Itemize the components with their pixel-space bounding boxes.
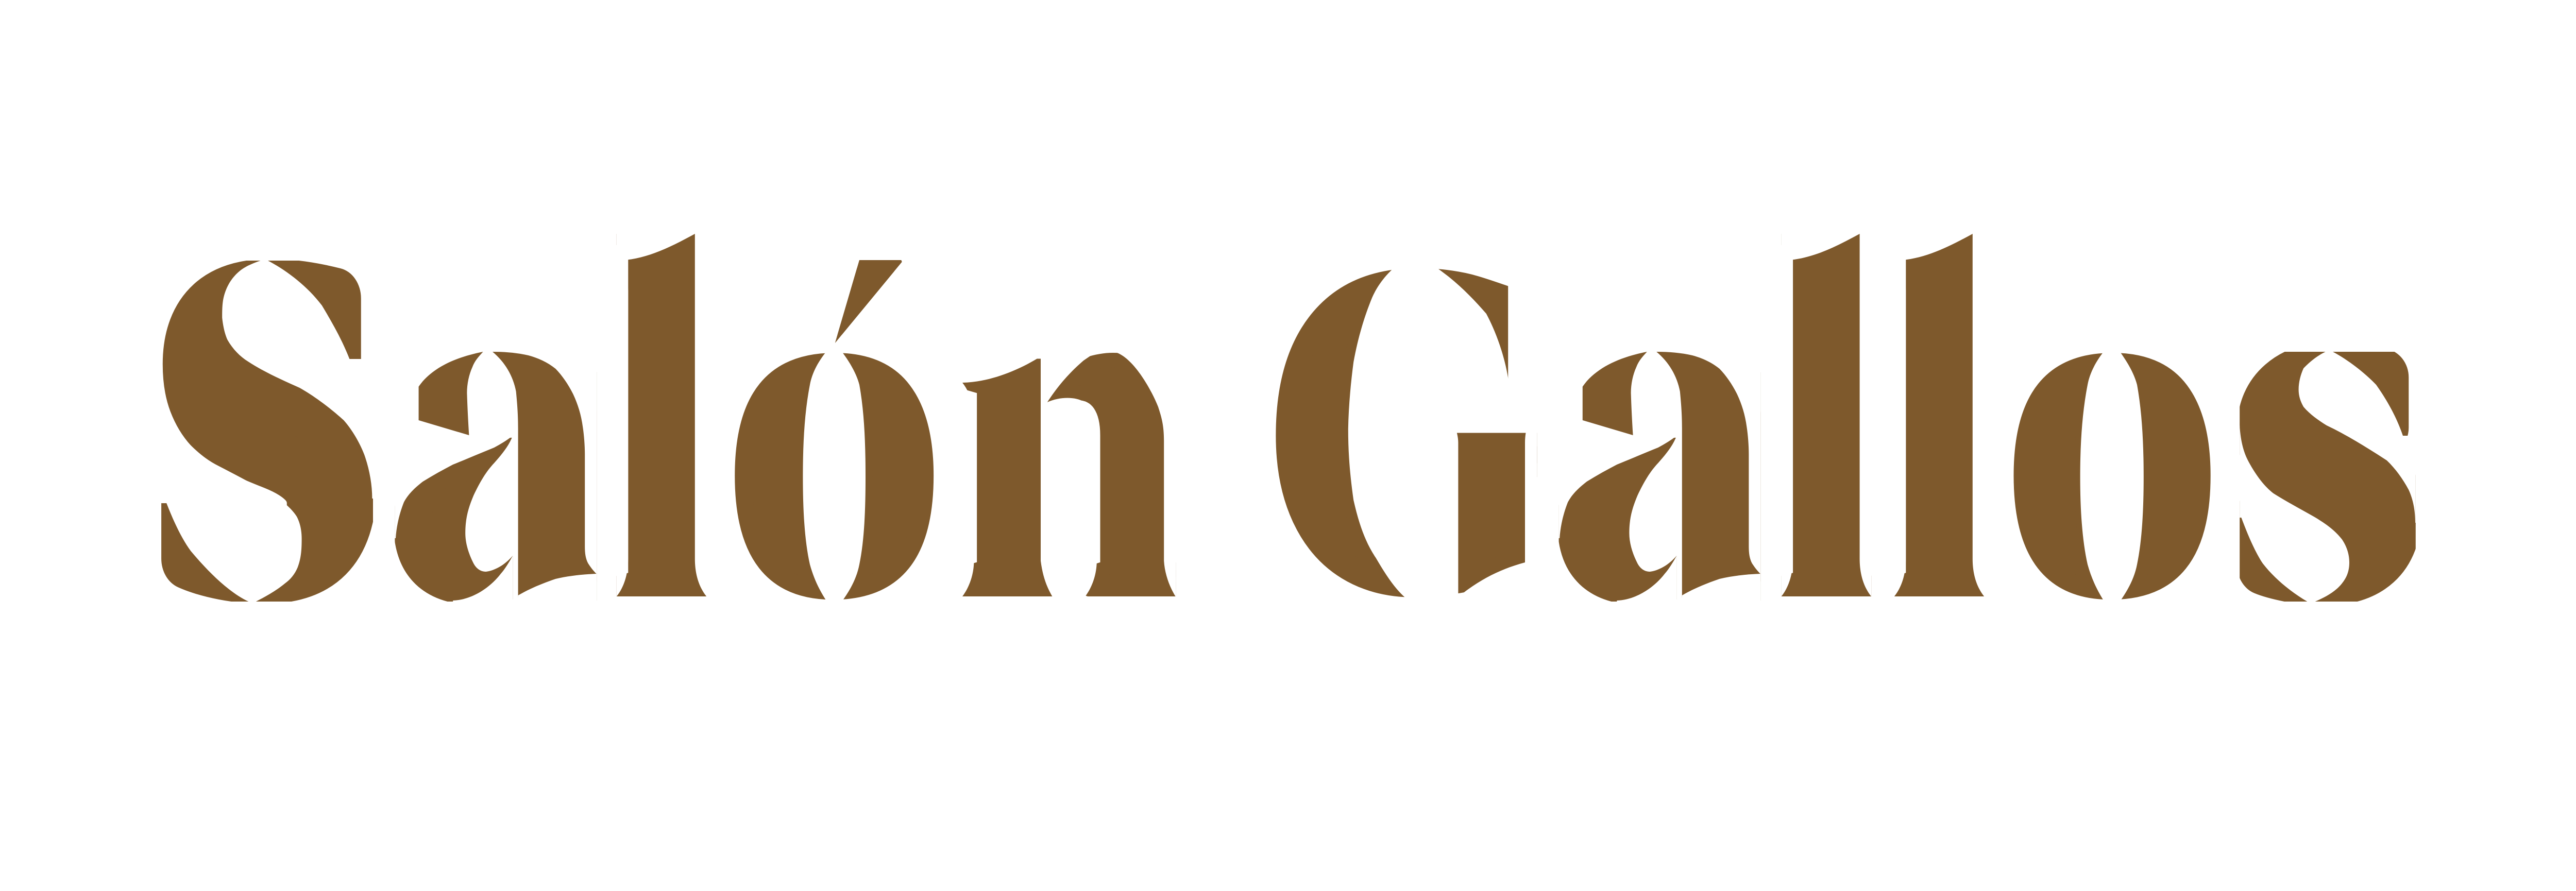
letter o bbox=[2013, 353, 2211, 599]
letter a (Gallos) bbox=[1559, 352, 1761, 602]
letter a: a bbox=[398, 175, 626, 680]
letter G bbox=[1276, 269, 1537, 597]
letter l (first of Gallos): l bbox=[1759, 119, 1893, 713]
letter o: o bbox=[2006, 163, 2218, 688]
letter s bbox=[2240, 352, 2416, 602]
letter l bbox=[616, 234, 707, 596]
letter n bbox=[962, 353, 1176, 596]
letter l (first of Gallos) bbox=[1782, 234, 1872, 596]
letter n: n bbox=[952, 156, 1195, 695]
letter ó: ó bbox=[727, 163, 941, 688]
letter a (Gallos): a bbox=[1562, 175, 1790, 680]
letter S: S bbox=[168, 193, 366, 660]
letter l (second of Gallos) bbox=[1894, 234, 1985, 596]
letter l: l bbox=[595, 119, 728, 713]
letter a bbox=[395, 352, 597, 602]
letter ó bbox=[735, 260, 934, 599]
title: Salón Gallos wordmark bbox=[161, 234, 2416, 602]
letter l (second of Gallos): l bbox=[1872, 119, 2006, 713]
letter S bbox=[161, 261, 373, 602]
letter G: G bbox=[1269, 179, 1550, 677]
letter s: s bbox=[2251, 192, 2405, 665]
accent of ó: ´ bbox=[810, 181, 906, 677]
